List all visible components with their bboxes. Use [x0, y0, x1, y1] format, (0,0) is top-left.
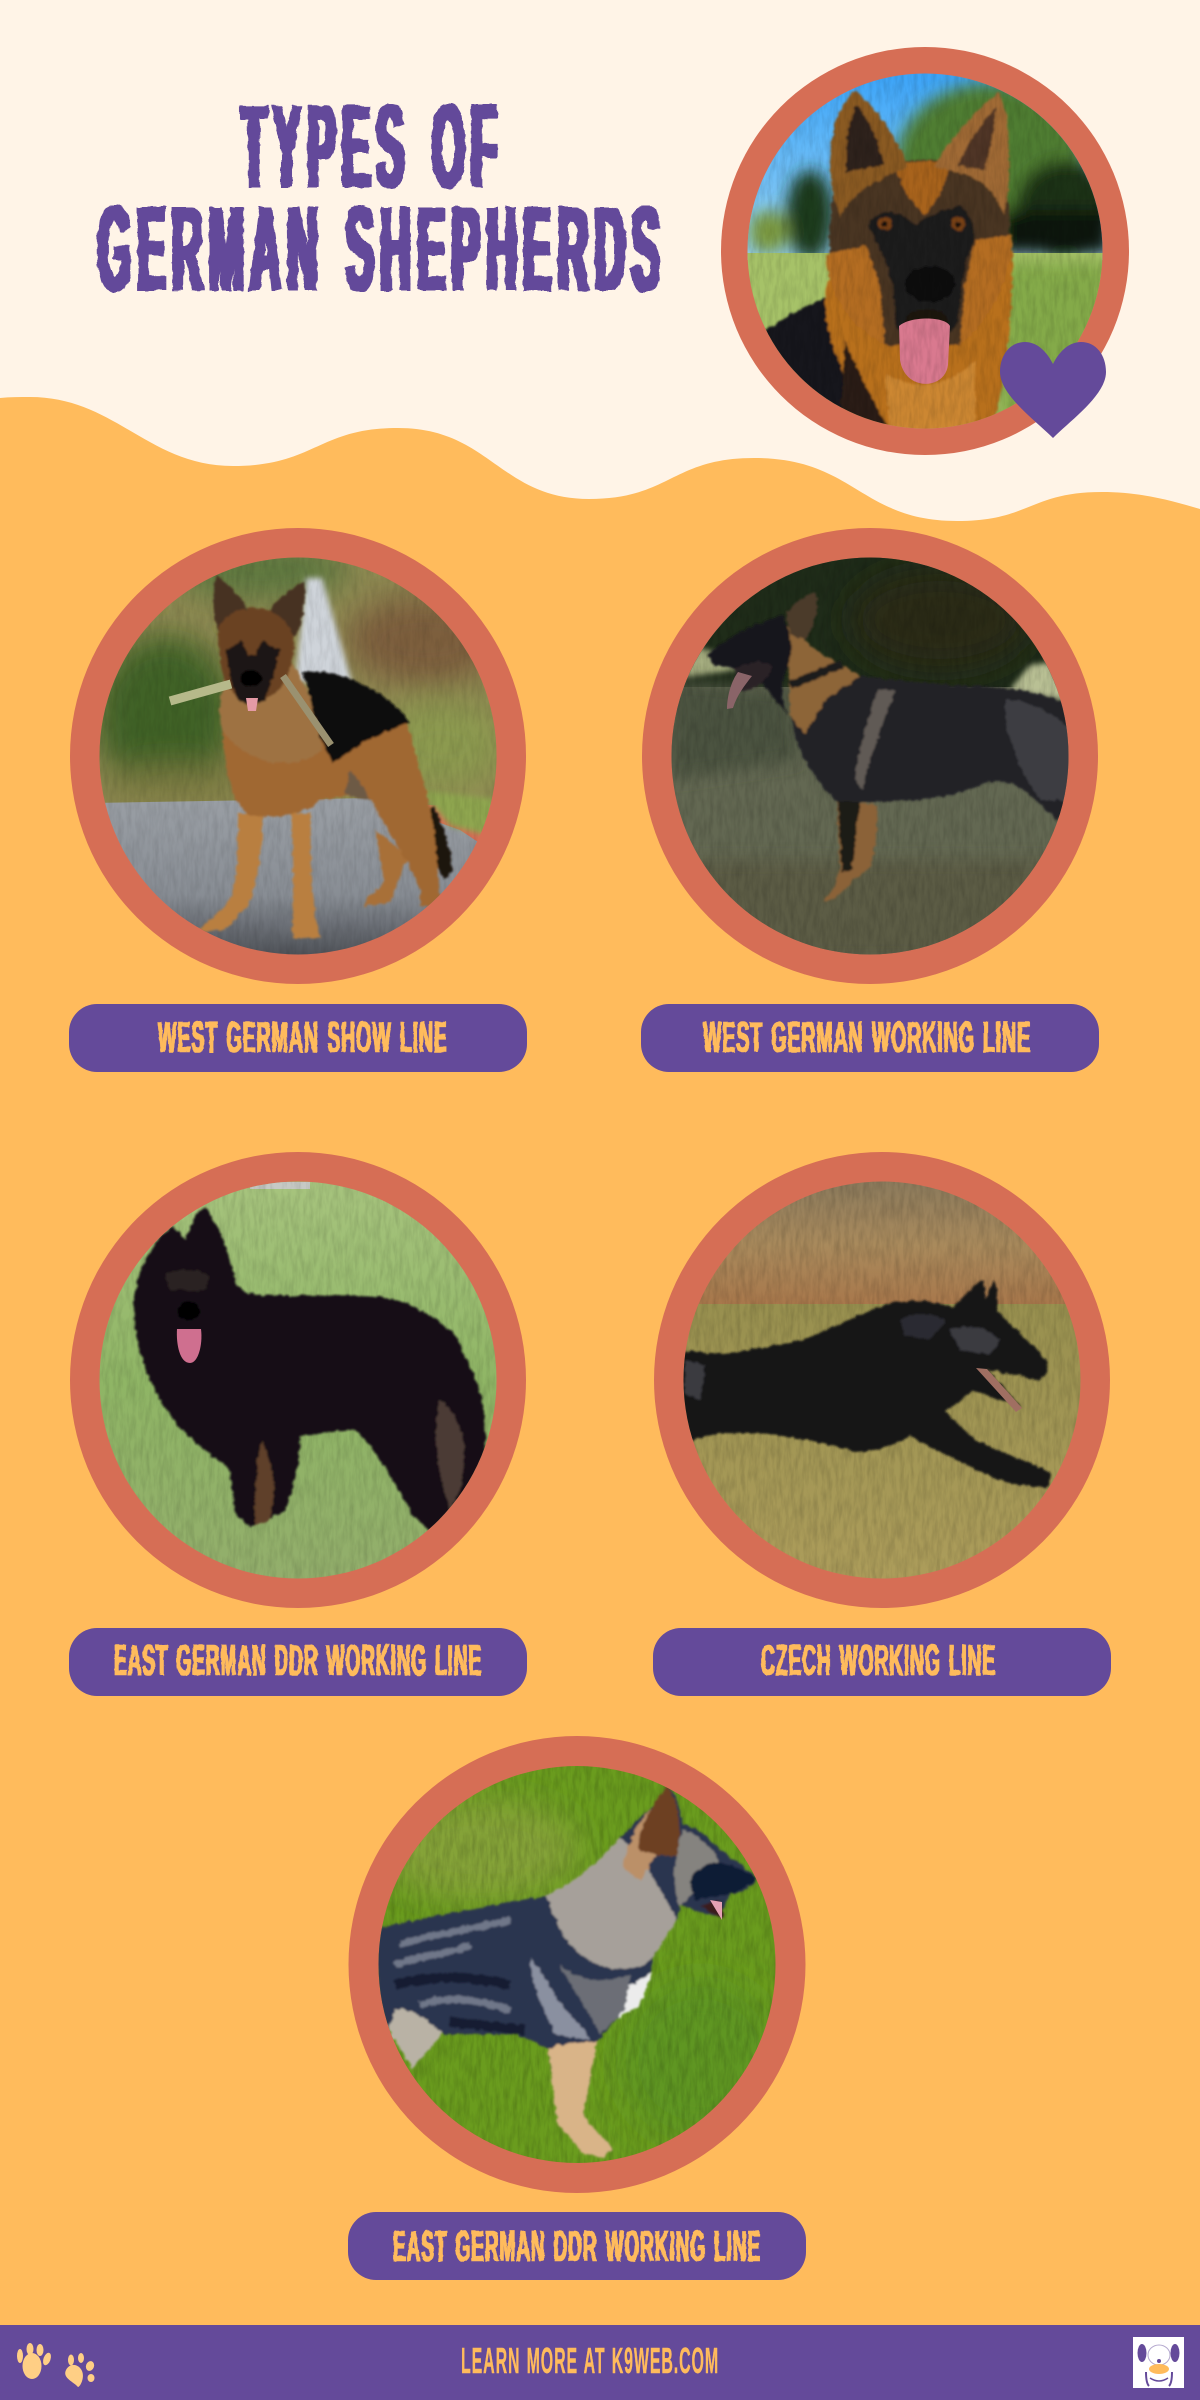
- photo: sable dog in profile on bright grass: [348, 1736, 806, 2193]
- footer bar: [0, 2325, 1200, 2400]
- icon: heart: [1000, 342, 1106, 438]
- title: [98, 81, 666, 316]
- title: TYPES OF: [241, 81, 503, 213]
- label pill: [69, 1004, 527, 1072]
- label pill: WEST GERMAN SHOW LINE: [158, 1013, 448, 1062]
- photo: dog holding stick on road: [70, 528, 526, 984]
- label pill: [69, 1628, 527, 1696]
- label pill: [641, 1004, 1099, 1072]
- label pill: [348, 2212, 806, 2280]
- icon: k9web logo: [1133, 2337, 1184, 2388]
- label pill: [653, 1628, 1111, 1696]
- icon: paw prints: [17, 2343, 95, 2387]
- infographic canvas: EAST GERMAN DDR WORKING LINE: [114, 1636, 482, 1685]
- hero photo: german shepherd portrait: [721, 47, 1129, 455]
- cream header background: [0, 0, 1200, 600]
- photo: black dog running in field: [654, 1152, 1110, 1608]
- infographic canvas: LEARN MORE AT K9WEB.COM: [461, 2340, 719, 2381]
- panel: west german show line: [69, 528, 527, 1072]
- panel: west german working line: [641, 528, 1099, 1072]
- photo: dark dog in profile on grass: [642, 528, 1098, 984]
- photo: long-haired black dog on grass: [70, 1152, 526, 1608]
- panel: east german ddr working line (second): [348, 1736, 806, 2280]
- panel: east german ddr working line: [69, 1152, 527, 1696]
- panel: czech working line: [653, 1152, 1111, 1696]
